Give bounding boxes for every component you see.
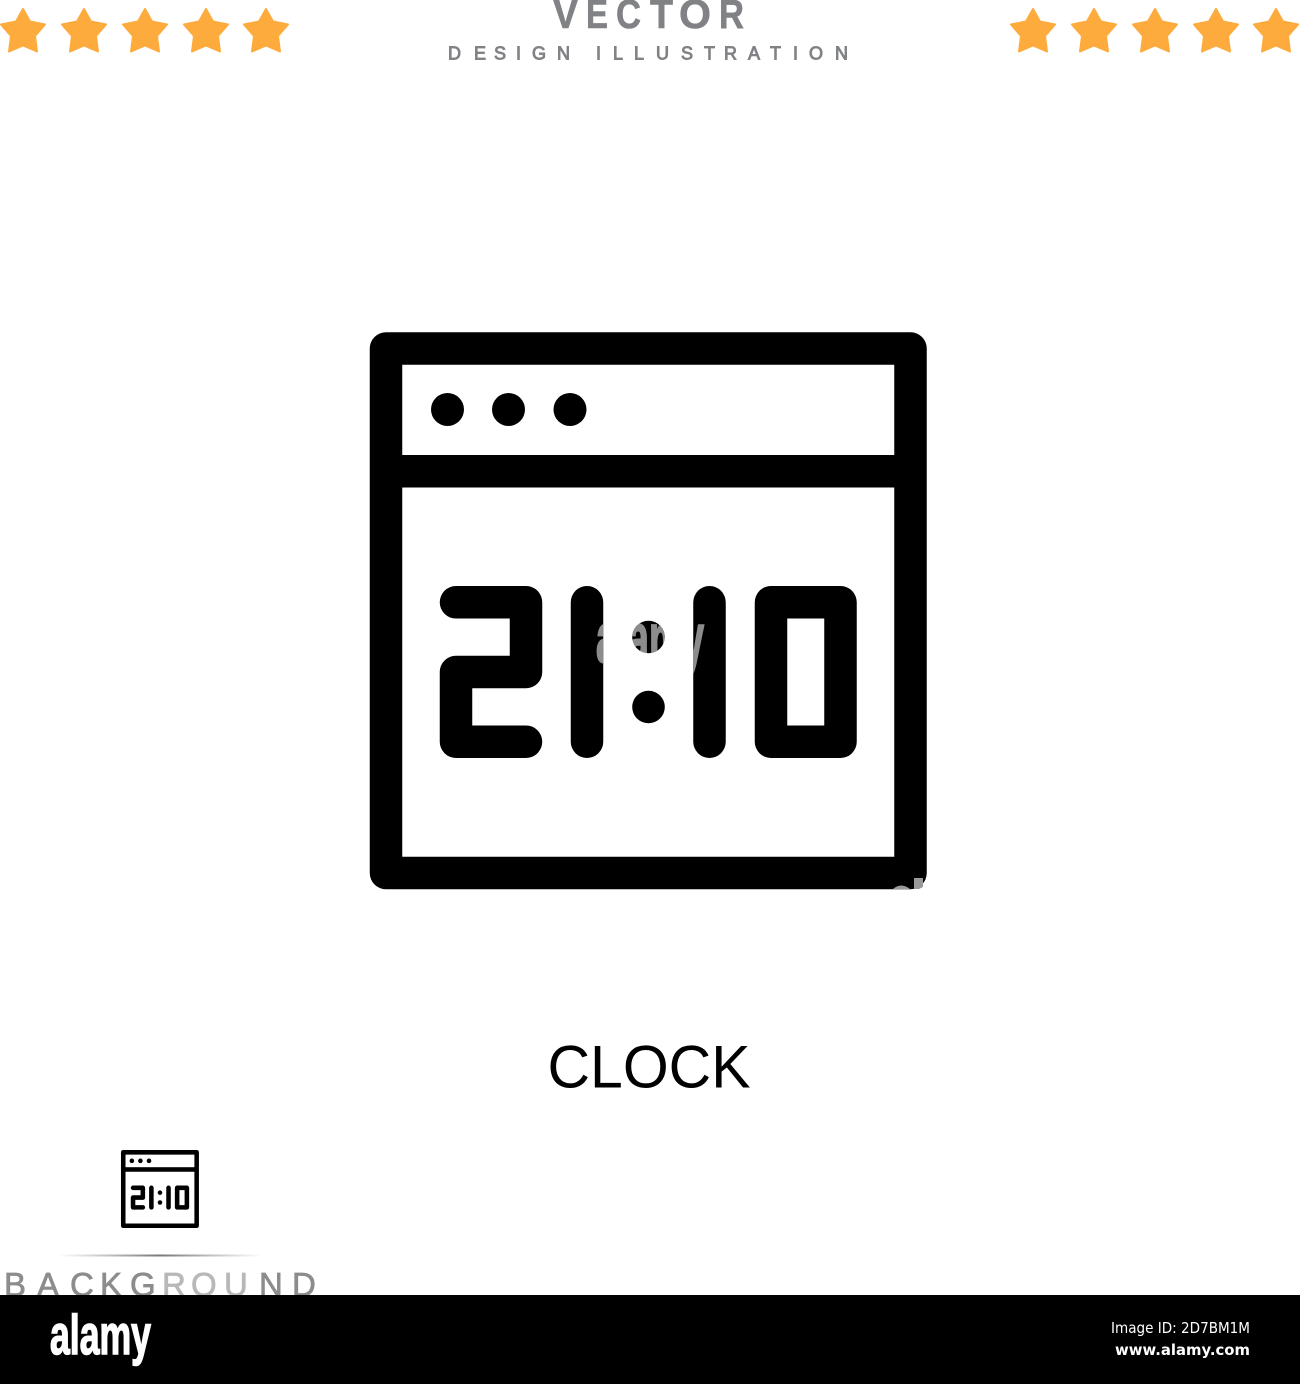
left star rating: [1, 9, 288, 52]
BACKGROUND label: BACKGROU ND: [4, 1266, 316, 1303]
footer bar: [0, 1295, 1300, 1384]
window control dots: [431, 393, 586, 426]
watermark over icon: alamy: [596, 599, 704, 677]
window frame: [386, 348, 910, 873]
website: www.alamy.com: [1115, 1341, 1250, 1359]
icon title: CLOCK: [548, 1032, 750, 1100]
watermark fragments on frame corner: [893, 878, 923, 889]
small icon preview: [123, 1152, 197, 1226]
alamy logo: alamy: [50, 1303, 151, 1366]
right star rating: [1011, 9, 1298, 52]
digital time 21:10: [456, 602, 840, 742]
image ID: Image ID: 2D7BM1M: [1111, 1319, 1250, 1337]
subheading: DESIGN ILLUSTRATION: DESIGNILLUSTRATION: [448, 44, 848, 64]
title bar divider: [386, 455, 910, 488]
heading: VECTOR: [553, 0, 744, 37]
main icon: browser window clock: [386, 348, 923, 889]
separator line: [58, 1254, 262, 1256]
